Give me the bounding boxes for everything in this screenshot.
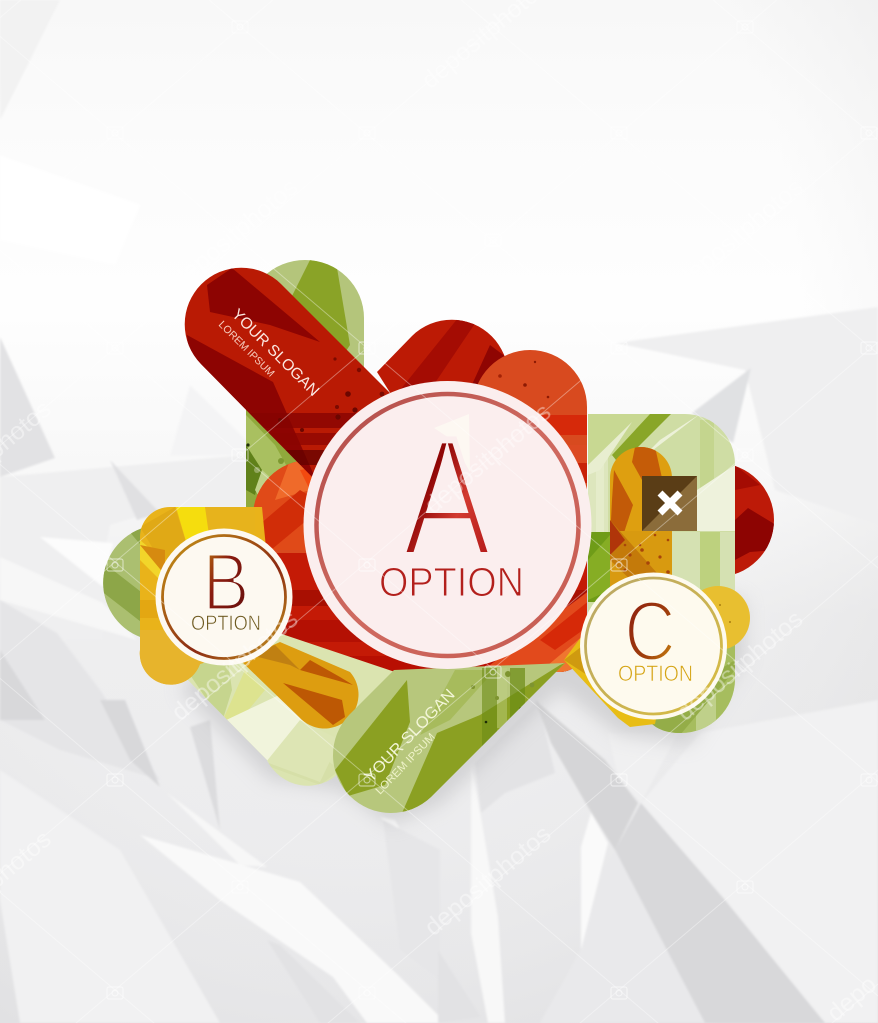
label: red pill slogan: LOREM IPSUM — [216, 319, 277, 379]
shape: green left lobe — [103, 528, 142, 637]
watermark text: depositphotos — [671, 605, 808, 727]
letter C: C — [624, 583, 676, 678]
circle C: option badge — [580, 572, 727, 720]
shape: large red and orange panel behind circle A — [250, 345, 590, 680]
shape: dark red half circle on the right — [735, 466, 774, 574]
shape: yellow strip below circle C — [564, 625, 660, 727]
shape: yellow pill behind circle B — [140, 507, 266, 685]
shape: green diagonal pill — [333, 663, 565, 813]
shape: green rounded tab behind — [246, 260, 364, 515]
circle B: option badge — [156, 528, 292, 666]
watermark text: depositphotos — [419, 820, 556, 942]
watermark text: depositphotos — [419, 398, 556, 520]
shape: yellow circle right of C — [686, 586, 750, 650]
shape: red top-centre pill — [377, 320, 504, 393]
shape: orange diagonal pill — [242, 642, 358, 728]
shape: red diagonal pill — [184, 268, 390, 477]
label: green pill slogan: LOREM IPSUM — [374, 731, 438, 797]
circle A: option label: OPTION — [379, 559, 524, 605]
option label B: OPTION — [191, 612, 261, 635]
label: red pill slogan: YOUR SLOGAN — [228, 306, 322, 400]
label: green pill slogan: YOUR SLOGAN — [362, 686, 459, 786]
circle A: main option badge — [304, 381, 592, 669]
letter B: B — [202, 537, 250, 628]
watermark text: depositphotos — [166, 605, 303, 727]
soft shadow under shapes — [180, 560, 745, 825]
watermark text: depositphotos — [166, 173, 303, 295]
shape: pale green panel on the right — [585, 412, 737, 736]
icon: close button — [642, 476, 697, 531]
shape: pale green lower diagonal pill — [188, 634, 393, 786]
letter A: A — [402, 404, 492, 592]
watermark text: depositphotos — [671, 173, 808, 295]
shape: ochre vertical pill — [610, 447, 672, 587]
option label C: OPTION — [618, 661, 693, 686]
